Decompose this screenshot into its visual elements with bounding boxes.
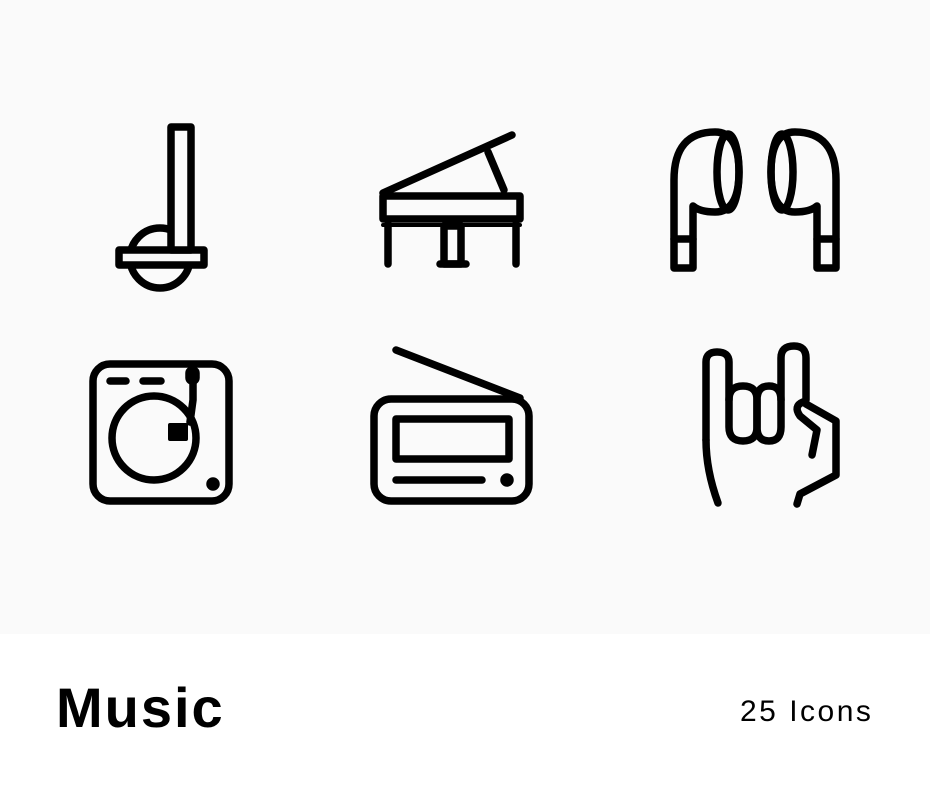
icon: grand piano — [383, 135, 520, 264]
icon: rock hand — [706, 346, 836, 504]
icon count: 25 Icons — [740, 695, 873, 728]
icon: turntable — [93, 364, 229, 501]
icon: earbuds — [674, 132, 836, 268]
icon: music note — [119, 127, 204, 288]
title: Music — [56, 676, 225, 739]
icon: radio — [374, 350, 529, 501]
